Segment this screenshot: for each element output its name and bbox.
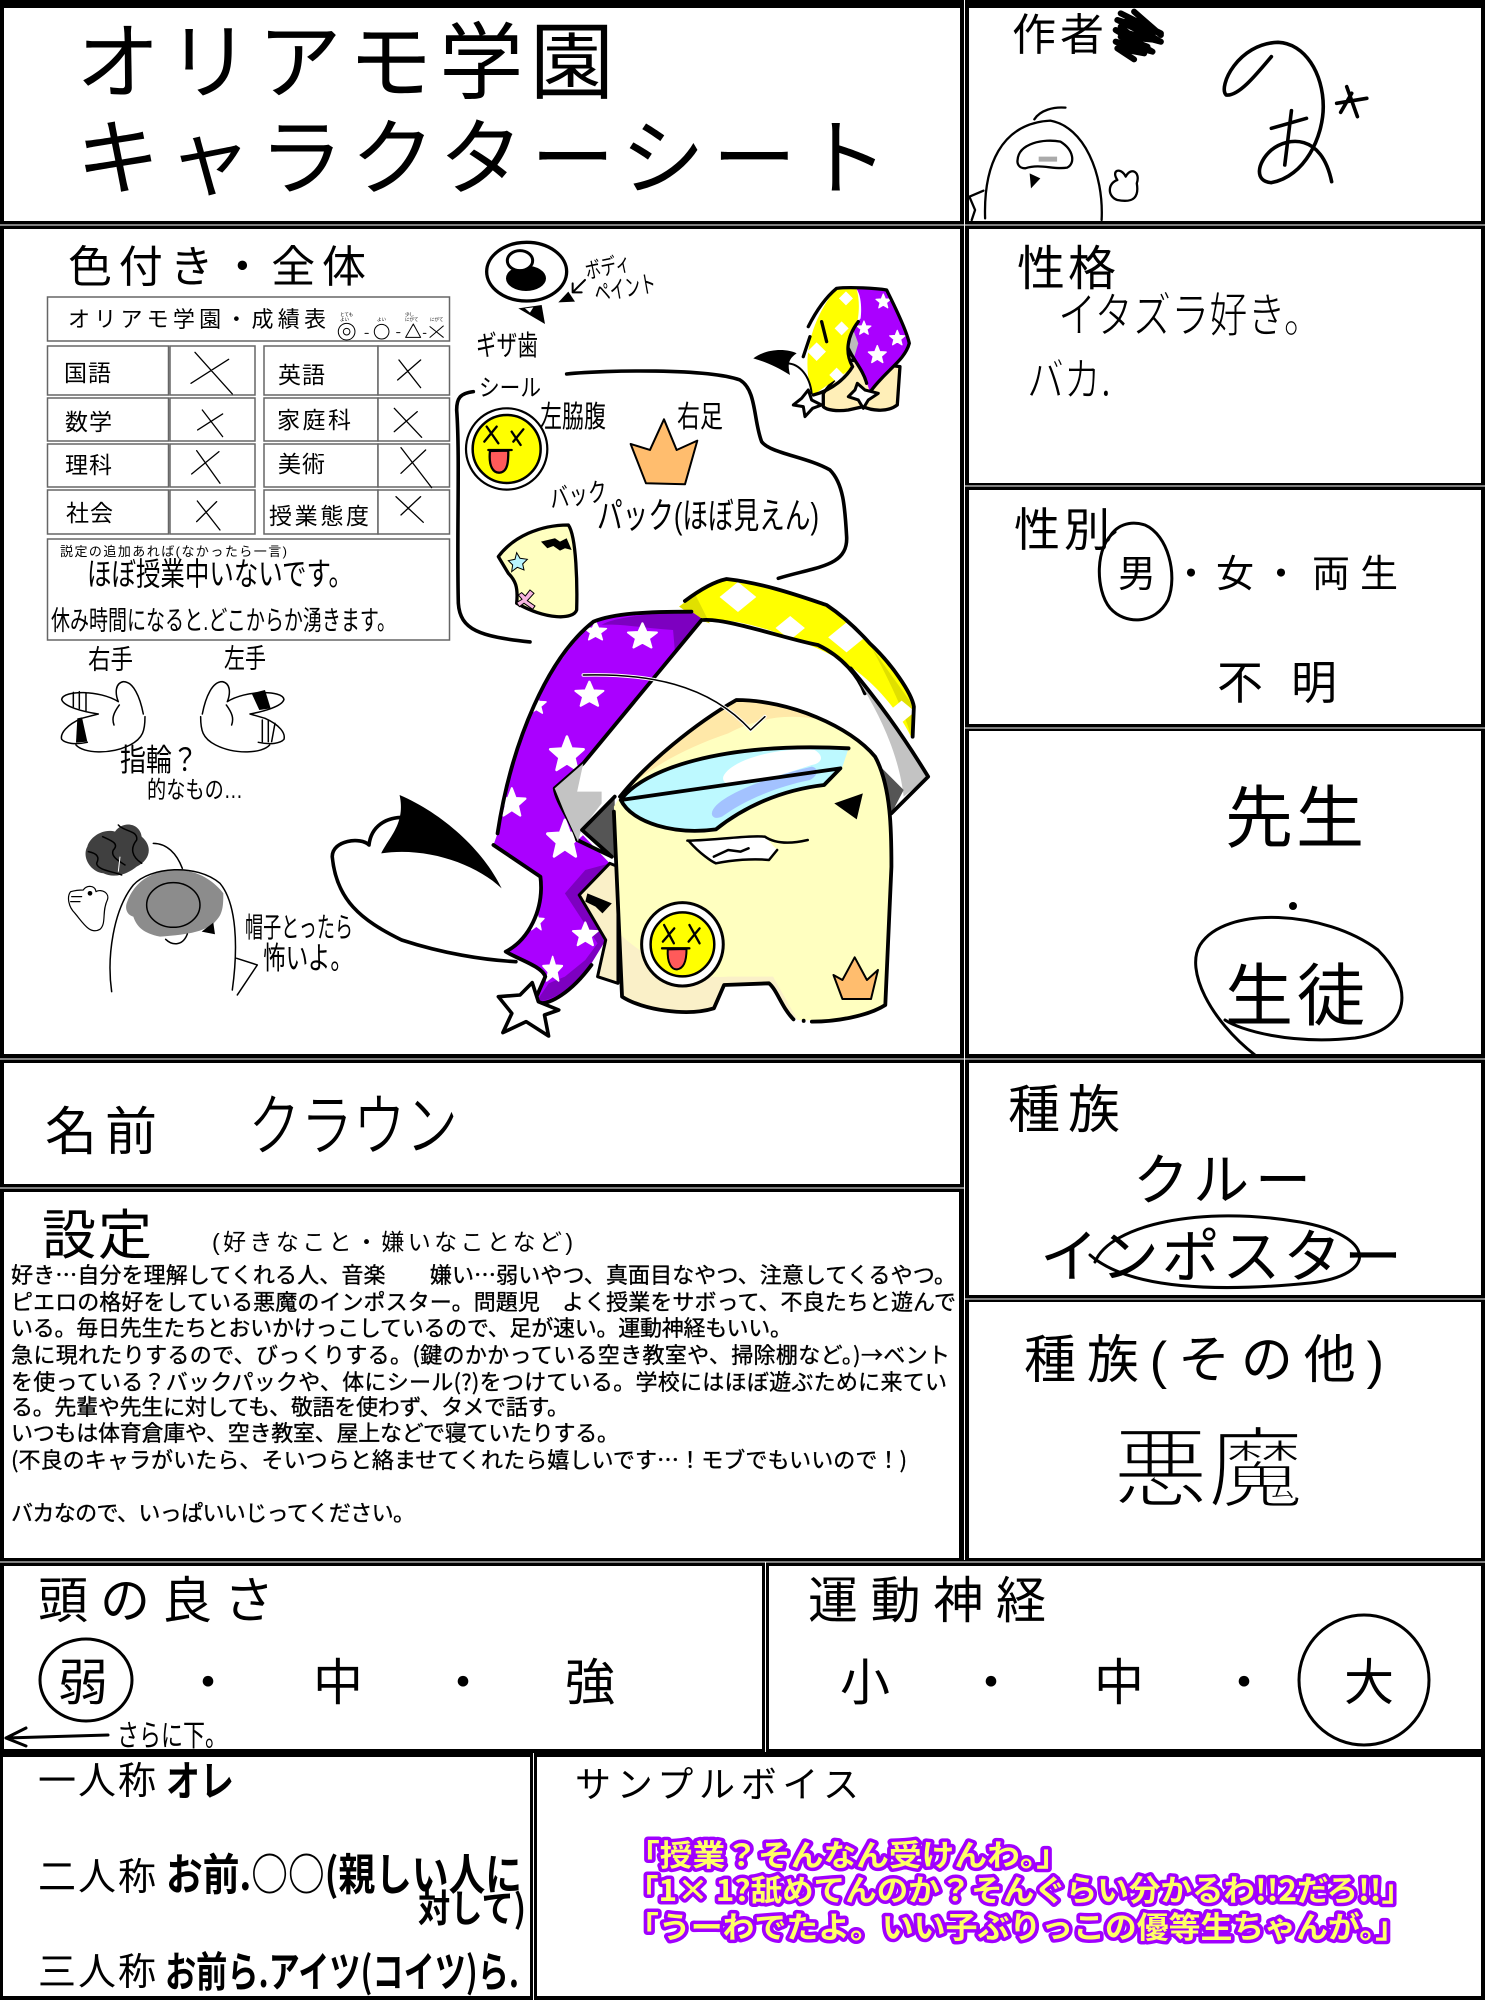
settings hint: (好きなこと・嫌いなことなど) (212, 1229, 573, 1255)
hands sketch (61, 644, 284, 804)
handwritten personality: バカ. (1027, 344, 1111, 410)
hat wire (583, 675, 765, 730)
voice lines: 「うーわでたよ。いい子ぶりっこの優等生ちゃんが。」 (627, 1903, 1407, 1947)
gender options: 男 (1118, 554, 1156, 596)
panel: teacher or student (969, 731, 1481, 1055)
voice lines (627, 1831, 1413, 1947)
panel: species other (969, 1302, 1481, 1558)
intelligence options: ・ (183, 1655, 233, 1711)
handwritten note: 休み時間になると.どこからか湧きます。 (51, 606, 396, 636)
third person: お前ら.アイツ(コイツ)ら. (165, 1939, 519, 2000)
heading: personality: 性格 (1017, 243, 1116, 296)
label: ring note: 指輪？ (120, 743, 198, 778)
circle around student (1196, 917, 1402, 1055)
panel: author (969, 8, 1481, 221)
grade legend: よい (340, 317, 349, 322)
handwritten species: 悪魔 (1113, 1399, 1303, 1526)
scribbled-out name (1116, 12, 1161, 59)
label: left flank: 左脇腹 (540, 392, 606, 436)
handwritten note: さらに下。 (117, 1711, 227, 1755)
settings body text: 急に現れたりするので、びっくりする。(鍵のかかっている空き教室や、掃除棚など。)→ベント (11, 1338, 950, 1370)
separator dot (1289, 902, 1297, 910)
icon: crown sticker (631, 419, 697, 484)
bubble: body paint (476, 242, 658, 364)
hat: purple side (493, 612, 704, 1003)
panel: athletics (769, 1566, 1481, 1749)
settings body text: いつもは体育倉庫や、空き教室、屋上などで寝ていたりする。 (11, 1416, 619, 1448)
athletics options: 小 (840, 1655, 890, 1711)
label: body paint: ペイント (592, 271, 658, 308)
second person: お前.○○(親しい人に (166, 1839, 522, 1903)
star tail tip (498, 983, 559, 1036)
panel: gender (969, 490, 1481, 724)
label: body paint (583, 250, 658, 308)
icon: smiley sticker (466, 408, 547, 490)
icon: left hand (201, 682, 284, 752)
icon: removed hat (86, 825, 149, 876)
report card (48, 297, 450, 640)
heading: sample voice: サンプルボイス (575, 1764, 859, 1805)
subject labels: 国語 (64, 360, 111, 386)
heading: species: 種族 (1008, 1082, 1120, 1140)
voice lines: 「1× 1?舐めてんのか？そんぐらい分かるわ!!2だろ!!」 (627, 1866, 1413, 1910)
athletics options (840, 1655, 1394, 1711)
label: backpack: バック (548, 476, 609, 514)
mouth with teeth (687, 836, 808, 863)
stickers bubble outline (457, 371, 847, 642)
hat: yellow side (679, 579, 915, 738)
subject labels: 理科 (65, 452, 112, 478)
icon: author bird (969, 107, 1138, 220)
crown sticker on body (833, 957, 878, 999)
athletics options: ・ (1219, 1655, 1269, 1711)
subject labels: 美術 (278, 451, 325, 477)
handwritten personality: イタズラ好き。 (1058, 276, 1322, 346)
panel: name (4, 1063, 960, 1184)
arrow: lower still (6, 1728, 108, 1746)
label: jagged teeth: ギザ歯 (476, 324, 538, 364)
main character illustration (332, 579, 928, 1036)
heading: species other: 種族(その他) (1024, 1332, 1384, 1390)
title (76, 16, 888, 206)
subject labels: 数学 (65, 409, 112, 435)
first person: オレ (166, 1748, 234, 1809)
backpack behind body (579, 863, 618, 983)
label: scary note (245, 912, 353, 976)
subject labels (64, 360, 369, 529)
small back view of character (753, 288, 909, 417)
tail hand (332, 795, 516, 962)
heading: coloured full body: 色付き・全体 (68, 243, 366, 292)
handwritten name: クラウン (248, 1071, 458, 1170)
panel: personality (969, 229, 1481, 483)
panel: title (4, 8, 960, 221)
option: teacher: 先生 (1225, 781, 1364, 857)
second person: 対して) (418, 1878, 526, 1933)
label: ring note (120, 743, 243, 804)
second person (38, 1839, 526, 1933)
intelligence options (58, 1655, 615, 1711)
panel: sample voice (537, 1757, 1481, 1996)
third person: 三人称 (38, 1952, 156, 1994)
gender options (1118, 554, 1398, 596)
option: crew: クルー (1133, 1149, 1311, 1212)
athletics options: ・ (966, 1655, 1016, 1711)
icon: backpack (498, 525, 577, 617)
option: student: 生徒 (1225, 959, 1365, 1035)
title: オリアモ学園 (76, 16, 614, 110)
grade legend: にがて (430, 316, 443, 323)
smiley sticker on body (642, 903, 723, 986)
heading: athletics: 運動神経 (808, 1573, 1046, 1629)
circle around impostor (1090, 1216, 1360, 1288)
voice lines: 「授業？そんなん受けんわ。」 (627, 1831, 1069, 1875)
third person (38, 1939, 519, 2000)
not specified option: 不明 (1217, 657, 1337, 709)
gender options: 女 (1216, 554, 1254, 596)
backpack bat mark (585, 893, 612, 913)
eye (834, 793, 863, 819)
intelligence options: 弱 (58, 1655, 108, 1711)
label: scary note: 帽子とったら (245, 912, 353, 943)
small prompt: 説定の追加あれば(なかったら一言) (60, 544, 287, 559)
grade legend: よい (377, 317, 386, 322)
grade legend (338, 311, 443, 340)
report card heading: オリアモ学園・成績表 (68, 307, 326, 332)
heading: gender: 性別 (1014, 504, 1110, 556)
handwritten personality (1027, 276, 1322, 410)
settings body text: いる。毎日先生たちとおいかけっこしているので、足が速い。運動神経もいい。 (11, 1311, 792, 1343)
handwritten note: ほぼ授業中いないです。 (87, 556, 353, 592)
grade legend: とても (340, 312, 353, 317)
athletics options: 中 (1094, 1655, 1144, 1711)
circle around big (1299, 1615, 1429, 1745)
panel: colored full body (4, 229, 960, 1054)
label: right foot: 右足 (677, 392, 723, 436)
gender options: ・ (1262, 554, 1300, 596)
icon: small hand (69, 886, 108, 931)
grade legend: 少し (405, 311, 414, 318)
title: キャラクターシート (76, 112, 888, 206)
settings body text: バカなので、いっぱいいじってください。 (11, 1496, 415, 1528)
panel: species (969, 1063, 1481, 1295)
heading: intelligence: 頭の良さ (38, 1573, 274, 1629)
author heading: 作者 (1012, 11, 1104, 60)
intelligence options: ・ (438, 1655, 488, 1711)
gender options: ・ (1172, 554, 1210, 596)
settings body text: を使っている？バックパックや、体にシール(?)をつけている。学校にはほぼ遊ぶために来てい (11, 1365, 947, 1397)
subject labels: 家庭科 (277, 407, 351, 433)
handwritten note (51, 556, 396, 636)
visor (621, 747, 849, 831)
body (614, 700, 891, 1022)
subject labels: 社会 (66, 500, 113, 526)
panel: settings (4, 1192, 959, 1558)
label: backpack: パック(ほぼ見えん) (597, 495, 819, 536)
settings body text: (不良のキャラがいたら、そいつらと絡ませてくれたら嬉しいです…！モブでもいいので！) (11, 1443, 907, 1475)
subject labels: 授業態度 (269, 503, 369, 529)
labels: right and left hand: 左手 (224, 644, 266, 674)
first person (38, 1748, 234, 1809)
signature (1224, 42, 1367, 183)
panel: intelligence (4, 1566, 762, 1755)
labels: right and left hand (88, 644, 266, 675)
settings body text (11, 1258, 956, 1528)
grade marks (191, 352, 432, 530)
settings body text: る。先輩や先生に対しても、敬語を使わず、タメで話す。 (11, 1390, 569, 1422)
hat: grey underside (555, 668, 928, 857)
option: impostor: インポスター (1040, 1225, 1402, 1290)
label: name: 名前 (45, 1104, 157, 1162)
intelligence options: 強 (565, 1655, 615, 1711)
circle around male (1099, 523, 1172, 620)
intelligence options: 中 (313, 1655, 363, 1711)
subject labels: 英語 (278, 362, 325, 388)
hatless bird sketch (69, 825, 353, 995)
label: body paint: ボディ (583, 250, 633, 284)
second person: 二人称 (38, 1857, 156, 1899)
circle around weak (40, 1639, 132, 1721)
label: scary note: 怖いよ。 (263, 941, 353, 976)
labels: right and left hand: 右手 (88, 645, 133, 675)
label: ring note: 的なもの… (147, 777, 243, 804)
grade legend: にがて (405, 316, 418, 323)
panel: pronouns (3, 1748, 530, 2000)
icon: right hand (61, 682, 145, 752)
gender options: 両生 (1312, 554, 1398, 596)
settings body text: ピエロの格好をしている悪魔のインポスター。問題児 よく授業をサボって、不良たちと遊んで (11, 1285, 956, 1317)
first person: 一人称 (38, 1761, 156, 1803)
icon: bird body (110, 843, 257, 995)
settings body text: 好き…自分を理解してくれる人、音楽 嫌い…弱いやつ、真面目なやつ、注意してくるやつ。 (11, 1258, 956, 1290)
label: backpack (548, 476, 819, 536)
label: stickers: シール (479, 368, 541, 403)
athletics options: 大 (1344, 1655, 1394, 1711)
heading: settings: 設定 (42, 1206, 152, 1266)
